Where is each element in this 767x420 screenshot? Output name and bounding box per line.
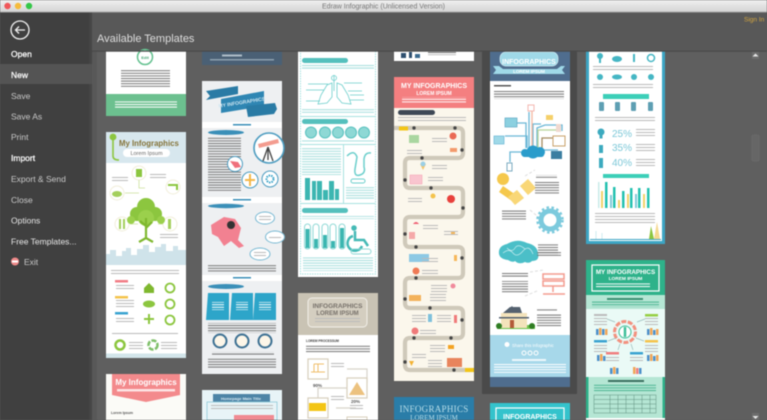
template column 4 [394, 51, 474, 420]
template card: light blue [202, 390, 282, 420]
header divider [92, 50, 767, 52]
window title: Edraw Infographic (Unlicensed Version) [322, 4, 445, 10]
title bar [0, 0, 767, 12]
footer caption: Share this Infographic [512, 343, 555, 348]
server illustration [543, 274, 565, 294]
sidebar [0, 12, 92, 420]
ribbon header: MY INFOGRAPHICS [218, 96, 266, 110]
sign in link: Sign In [744, 16, 765, 24]
telescope illustration [228, 133, 284, 188]
mini area chart [596, 222, 660, 239]
window minimize button [15, 3, 21, 9]
astronaut illustration [211, 212, 284, 260]
icon: exit [11, 258, 19, 266]
template card: green footer [106, 50, 186, 116]
card title: My Infographics [115, 378, 177, 387]
window zoom button [26, 3, 32, 9]
menu: Open: Open [11, 49, 32, 59]
center dial [614, 322, 636, 342]
icon: gear [538, 208, 562, 232]
donut stats [214, 334, 272, 348]
window close button [4, 3, 11, 9]
template card: teal bottom [490, 403, 570, 420]
icon: light bulb [113, 136, 119, 160]
card subtitle: LOREM IPSUM [316, 311, 359, 317]
header band [92, 12, 767, 51]
template card: blue serif title [394, 397, 474, 420]
template card: green footer: Edit [141, 55, 149, 60]
menu: Free Templates: Free Templates... [11, 236, 77, 246]
ribbon header [206, 86, 277, 117]
side notes [594, 314, 658, 362]
template card: light blue: Homepage Main Title [221, 396, 262, 401]
scroll up arrow [752, 52, 759, 59]
satellite illustration [497, 170, 542, 220]
template card: My Infographics tree [106, 132, 186, 358]
road icons [409, 132, 462, 367]
menu: Export & Send: Export & Send [11, 174, 66, 184]
menu: Save: Save [11, 91, 31, 101]
heading: Available Templates: Available Templates [97, 33, 195, 45]
card title: INFOGRAPHICS [399, 404, 469, 414]
icon: recycling [116, 340, 124, 350]
battery icons [599, 102, 653, 111]
lungs diagram [306, 75, 364, 104]
card title: My Infographics [119, 139, 179, 148]
icon: back arrow [11, 21, 29, 39]
ribbon [493, 66, 565, 74]
selected row: New [0, 64, 92, 84]
road stops [399, 126, 474, 372]
selected template column [482, 51, 577, 394]
footer [490, 335, 570, 377]
winding road [394, 128, 474, 370]
stat rows [115, 280, 174, 324]
stat: 25%: 25% [612, 129, 632, 140]
scroll down arrow [752, 413, 759, 420]
percentage stats [612, 129, 632, 169]
scroll thumb [752, 135, 759, 161]
template card: blue border stats [586, 51, 665, 244]
template card: pink banner: Lorem Ipsum [111, 411, 133, 415]
menu: New: New [11, 70, 29, 80]
template card: slate top [202, 51, 282, 65]
card subtitle: LOREM IPSUM [609, 276, 642, 282]
card subtitle: Lorem Ipsum [130, 151, 163, 157]
teal bar chart [305, 178, 339, 200]
blue info cards [206, 293, 276, 320]
template card: technology [490, 51, 570, 387]
menu: Exit: Exit [24, 257, 39, 267]
menu: Save As: Save As [11, 112, 42, 122]
route captions [407, 136, 458, 367]
template column 3 [298, 51, 378, 420]
bar chart [598, 182, 650, 208]
template card: beige infographics: LOREM PROCESSUM [306, 339, 339, 343]
menu: Print: Print [11, 132, 29, 142]
circle icons row [306, 127, 370, 138]
card title: MY INFOGRAPHICS [401, 83, 467, 90]
template card: road map [394, 77, 474, 381]
menu: Import: Import [11, 153, 36, 163]
menu: Close: Close [11, 195, 33, 205]
icon: wheelchair [348, 226, 368, 251]
process flow [308, 359, 367, 420]
brain illustration [499, 241, 538, 263]
weather icons [597, 53, 654, 80]
icon: recycling pair [148, 340, 158, 350]
stat: 35%: 35% [612, 143, 632, 154]
city skyline [106, 244, 186, 265]
template column 5 [490, 51, 570, 420]
template column 6 [586, 51, 665, 420]
template card: green infographic [586, 260, 665, 420]
menu: Options: Options [11, 216, 40, 226]
template card: blue ribbon [202, 81, 284, 374]
process flow: 20% [351, 399, 360, 404]
stat icons [598, 128, 604, 168]
template card: beige infographics [298, 293, 378, 420]
card subtitle: LOREM IPSUM [416, 91, 452, 97]
card title: MY INFOGRAPHICS [596, 269, 655, 276]
card subtitle: LOREM IPSUM [513, 69, 545, 74]
template card: pink banner [106, 374, 186, 420]
gallery left gutter [92, 51, 97, 420]
template card: top icons [394, 51, 474, 61]
tree diagram [110, 166, 180, 242]
process flow: 90% [313, 383, 322, 388]
thermometer chart [304, 224, 345, 249]
card title: INFOGRAPHICS [313, 303, 363, 310]
template column 1 [106, 50, 186, 420]
stethoscope [347, 153, 371, 175]
data table [594, 395, 656, 413]
stat: 40%: 40% [612, 158, 632, 169]
cloud network diagram [494, 105, 565, 171]
template column 2 [202, 51, 284, 420]
template card: medical teal [298, 51, 378, 277]
scrollbar [752, 52, 759, 420]
card title: INFOGRAPHICS [502, 59, 556, 66]
house illustration [496, 306, 535, 329]
mini bar charts [596, 328, 658, 374]
